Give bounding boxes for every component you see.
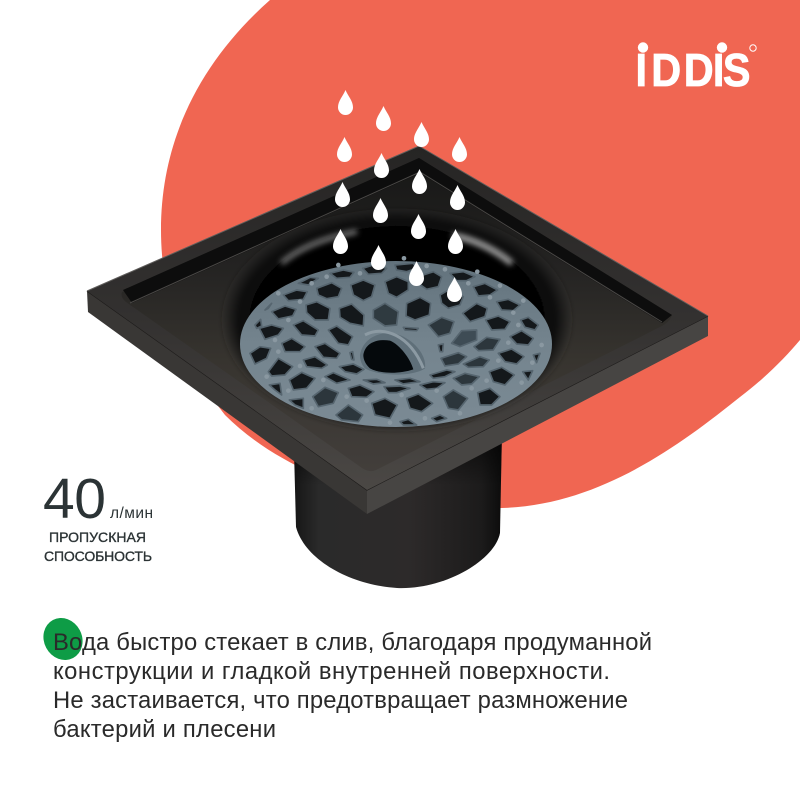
- stat unit: л/мин: [110, 505, 153, 522]
- tray groove: [123, 158, 672, 323]
- description text: бактерий и плесени: [53, 716, 276, 743]
- background coral shape: [161, 0, 800, 508]
- groove edge line: [130, 172, 662, 322]
- logo: iddis: IDDIS: [636, 45, 751, 97]
- description text: [53, 629, 652, 743]
- bowl highlights: [283, 232, 510, 262]
- strainer holes: [250, 263, 540, 425]
- funnel bowl: [221, 208, 573, 432]
- stat: flow capacity: [43, 467, 153, 564]
- description text: Вода быстро стекает в слив, благодаря продуманной: [53, 629, 652, 656]
- green accent blob: [36, 611, 90, 667]
- stat caption line 2: СПОСОБНОСТЬ: [44, 548, 152, 564]
- recessed tray: [122, 158, 672, 471]
- frame top surface: [87, 146, 708, 490]
- drain pipe: [294, 430, 502, 588]
- water drops: [333, 90, 467, 302]
- frame outer side: [87, 291, 708, 514]
- description text: конструкции и гладкой внутренней поверхности.: [53, 658, 610, 685]
- stat caption line 1: ПРОПУСКНАЯ: [49, 529, 146, 545]
- strainer grate: [240, 256, 552, 427]
- stat value 40: 40: [43, 467, 106, 531]
- central drain hole: [360, 331, 425, 375]
- strainer studs: [264, 256, 544, 425]
- description text: Не застаивается, что предотвращает размножение: [53, 687, 628, 714]
- product: floor drain: [87, 146, 708, 588]
